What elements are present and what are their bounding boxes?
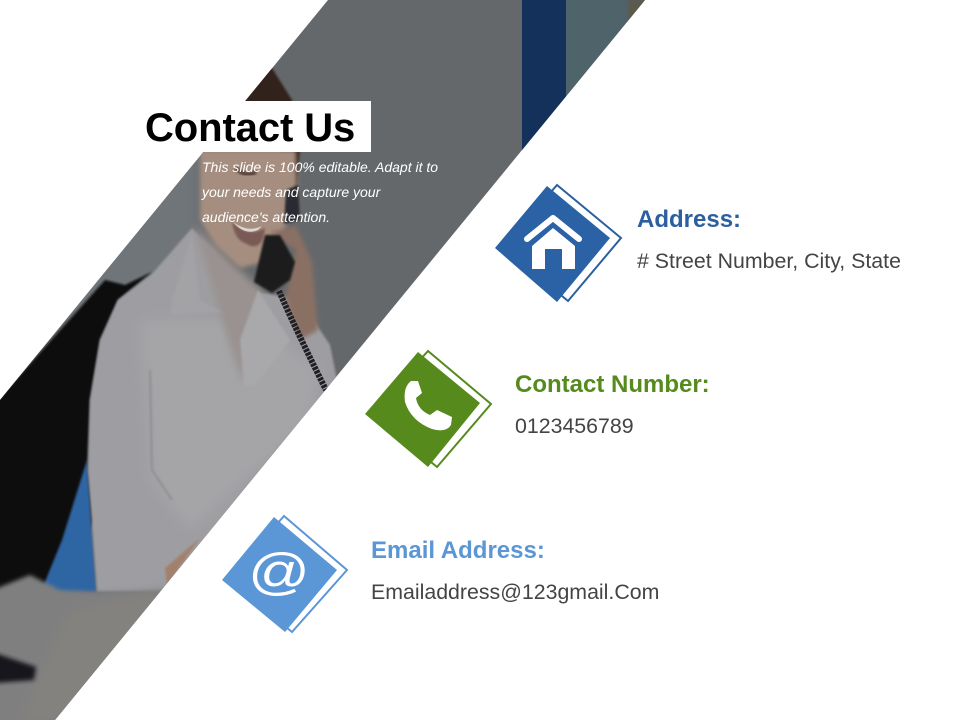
photo: woman on the phone <box>0 0 660 720</box>
subtitle line 3: audience's attention. <box>202 209 330 225</box>
icon: email diamond <box>222 516 347 632</box>
title: Contact Us <box>145 106 355 150</box>
neck <box>194 225 262 385</box>
diagonal photo band and icons <box>0 0 645 720</box>
shirt <box>88 228 345 592</box>
hand <box>270 226 318 340</box>
jacket <box>0 272 152 600</box>
chair <box>40 460 96 594</box>
email heading: Email Address: <box>371 537 545 564</box>
subtitle line 2: your needs and capture your <box>202 184 380 200</box>
icon: at sign: @ <box>248 543 310 600</box>
icon: address diamond <box>495 185 621 302</box>
cord <box>279 291 326 390</box>
address heading: Address: <box>637 206 741 233</box>
sleeve and desk <box>0 572 162 720</box>
contact number heading: Contact Number: <box>515 371 710 398</box>
hair <box>240 68 300 190</box>
title background <box>145 101 371 152</box>
contact number text: 0123456789 <box>515 414 634 438</box>
face <box>200 150 297 268</box>
icon: phone diamond <box>365 351 491 467</box>
subtitle line 1: This slide is 100% editable. Adapt it to <box>202 159 438 175</box>
icon: house <box>527 218 579 269</box>
collar <box>170 235 222 315</box>
address text: # Street Number, City, State <box>637 249 901 273</box>
email text: Emailaddress@123gmail.Com <box>371 580 659 604</box>
handset <box>284 185 300 224</box>
icon: handset <box>405 381 452 430</box>
